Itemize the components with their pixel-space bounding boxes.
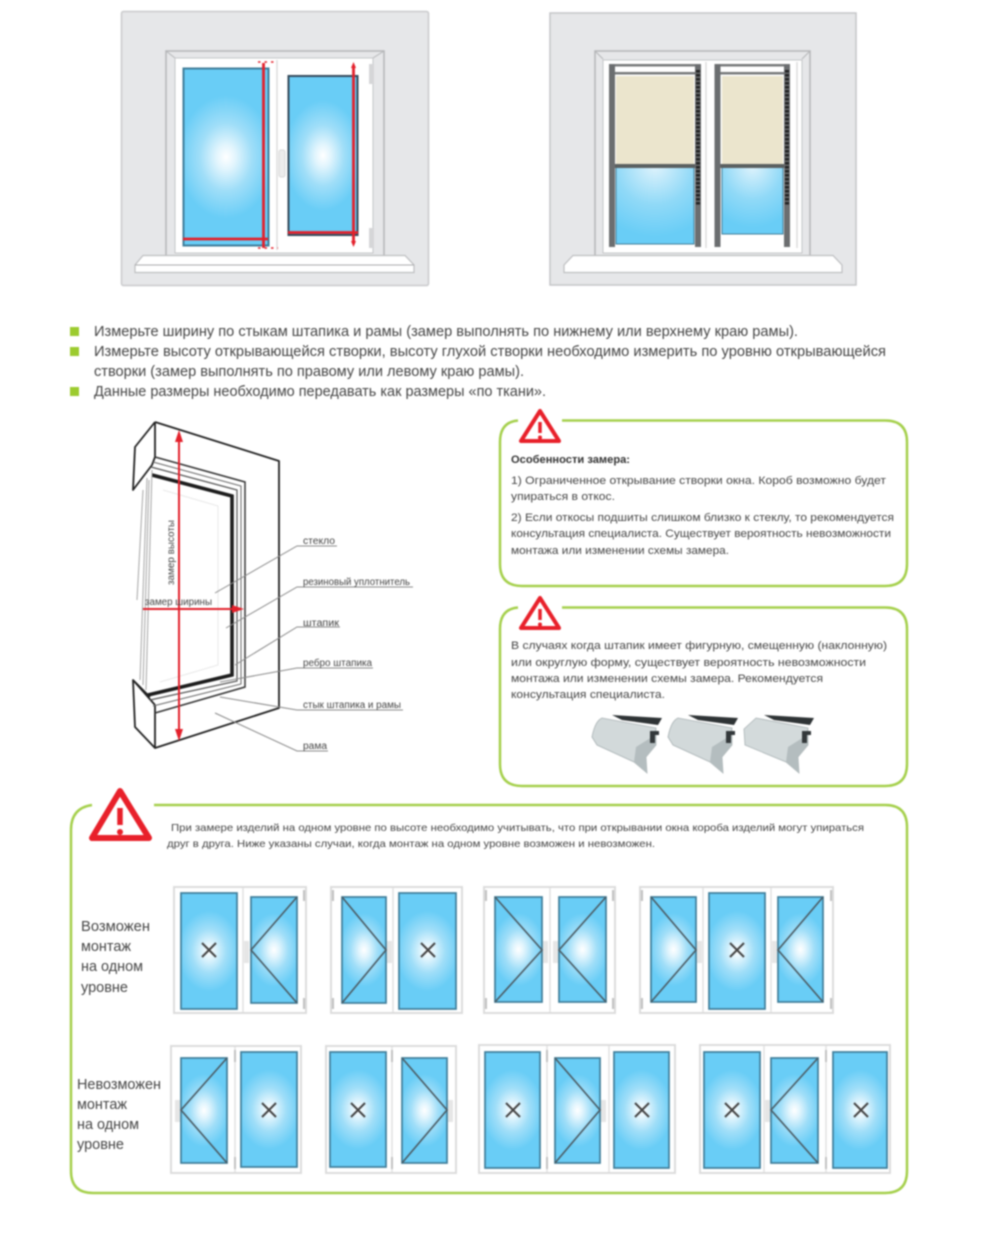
instruction 3: Данные размеры необходимо передавать как размеры «по ткани». — [94, 384, 546, 400]
window scheme 1: fixed + opening — [174, 887, 306, 1013]
height label: замер высоты — [166, 520, 177, 585]
windowsill — [564, 256, 842, 272]
illustration: window with measurement marks — [122, 12, 428, 286]
panel text: упираться в откос. — [511, 491, 615, 503]
panel: measurement features — [500, 411, 907, 586]
instruction 1: Измерьте ширину по стыкам штапика и рамы (замер выполнять по нижнему или верхнему краю рамы). — [94, 324, 798, 340]
part labels: резиновый уплотнитель — [303, 577, 410, 588]
window scheme 8: fixed + opening + fixed — [700, 1045, 890, 1173]
row label: possible — [81, 918, 150, 996]
bullet marker — [70, 347, 79, 356]
diagram: window recess in perspective — [133, 422, 413, 752]
panel text: монтажа или изменении схемы замера. Рекомендуется — [511, 673, 823, 685]
instruction list — [70, 324, 886, 400]
bead profile 3 — [744, 715, 814, 773]
panel text: консультация специалиста. — [511, 689, 665, 701]
row label: possible: монтаж — [81, 938, 131, 955]
window scheme 4: opening + fixed + opening — [640, 887, 833, 1013]
right blind — [714, 64, 790, 247]
right glass pane — [288, 76, 358, 235]
red height arrow — [175, 430, 183, 741]
panel text: консультация специалиста. Существует вероятность невозможности — [511, 528, 891, 540]
window scheme 3: opening + opening — [484, 887, 615, 1013]
leader lines — [215, 546, 413, 751]
instruction 2 — [94, 344, 886, 380]
bead profile 2 — [668, 715, 738, 773]
panel text — [511, 640, 887, 701]
part labels: ребро штапика — [303, 657, 372, 669]
row label: possible: уровне — [81, 979, 128, 996]
instruction 2: створки (замер выполнять по правому или левому краю рамы). — [94, 364, 524, 380]
part labels: штапик — [303, 618, 340, 629]
part labels: рама — [303, 741, 327, 752]
part labels: стекло — [303, 536, 335, 547]
icon: large warning triangle — [92, 791, 149, 838]
red measurement marks — [183, 62, 358, 248]
panel heading: Особенности замера: — [511, 454, 630, 466]
row label: impossible: уровне — [77, 1136, 124, 1153]
left glass pane — [184, 68, 268, 246]
row label: impossible — [77, 1076, 161, 1153]
width label: замер ширины — [145, 597, 212, 608]
icon: warning triangle — [521, 598, 559, 628]
part labels — [303, 536, 410, 752]
panel intro text: При замере изделий на одном уровне по высоте необходимо учитывать, что при открывании окна короба изделий могут упираться — [171, 822, 864, 834]
icon: warning triangle — [521, 411, 559, 441]
bead profile 1 — [592, 715, 662, 773]
row label: impossible: Невозможен — [77, 1076, 161, 1093]
panel intro text — [167, 822, 864, 850]
illustration: window with roller blinds — [550, 13, 856, 285]
red width arrow — [143, 605, 244, 613]
panel: mounting on one level — [71, 791, 907, 1193]
window scheme 2: opening + fixed — [331, 887, 462, 1013]
panel text: 1) Ограниченное открывание створки окна. Короб возможно будет — [511, 475, 886, 487]
window scheme 6: fixed + opening — [326, 1046, 456, 1173]
row label: possible: Возможен — [81, 918, 150, 935]
instruction 2: Измерьте высоту открывающейся створки, высоту глухой створки необходимо измерить по уровню открывающейся — [94, 344, 886, 360]
window scheme 5: opening + fixed — [171, 1046, 301, 1173]
panel text: монтажа или изменении схемы замера. — [511, 545, 729, 557]
window scheme 7: fixed + opening + fixed — [479, 1045, 675, 1173]
row label: impossible: на одном — [77, 1116, 139, 1133]
window handle — [279, 150, 285, 177]
panel text: или округлую форму, существует вероятность невозможности — [511, 657, 866, 669]
panel text: 2) Если откосы подшиты слишком близко к стеклу, то рекомендуется — [511, 512, 894, 524]
row label: impossible: монтаж — [77, 1096, 127, 1113]
panel text: В случаях когда штапик имеет фигурную, смещенную (наклонную) — [511, 640, 887, 652]
bullet marker — [70, 387, 79, 396]
left blind — [609, 64, 701, 247]
part labels: стык штапика и рамы — [303, 700, 401, 711]
bullet marker — [70, 327, 79, 336]
windowsill — [135, 256, 414, 272]
wall outline — [133, 422, 279, 748]
row label: possible: на одном — [81, 958, 143, 975]
panel text — [511, 475, 894, 557]
panel: glazing bead shapes — [500, 598, 907, 786]
panel intro text: друг в друга. Ниже указаны случаи, когда монтаж на одном уровне возможен и невозможен. — [167, 838, 655, 850]
